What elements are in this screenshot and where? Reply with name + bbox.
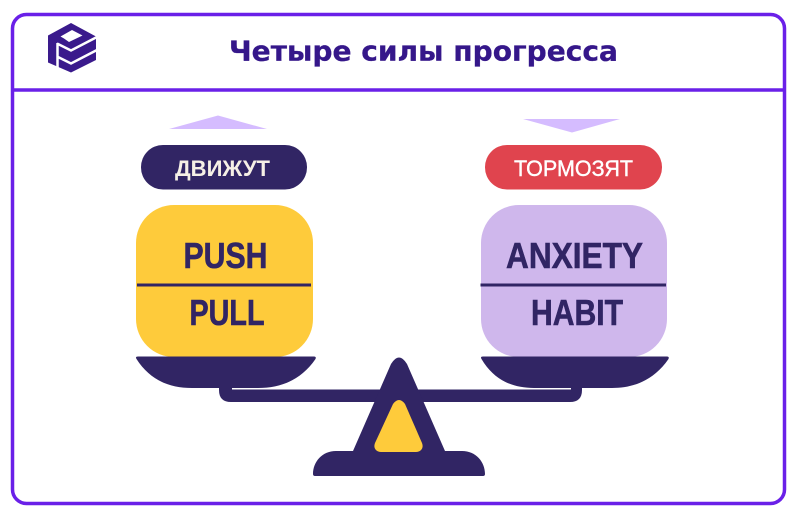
title: Четыре силы прогресса	[229, 34, 618, 68]
right pan	[481, 356, 669, 388]
fulcrum inset	[374, 400, 423, 452]
beam	[219, 386, 582, 402]
icon: logo	[48, 23, 97, 72]
left pan	[136, 356, 316, 388]
arrow: down	[523, 119, 620, 132]
label pill: тормозят	[485, 145, 662, 190]
weight: push and pull: PULL	[190, 292, 264, 333]
scale	[136, 356, 669, 476]
arrow: up	[169, 116, 267, 129]
label pill: тормозят: ТОРМОЗЯТ	[514, 156, 633, 181]
fulcrum	[313, 358, 485, 476]
weight: push and pull	[136, 205, 313, 357]
weight: anxiety and habit	[480, 205, 667, 357]
weight: anxiety and habit: ANXIETY	[506, 235, 643, 276]
weight: anxiety and habit: HABIT	[531, 292, 623, 333]
label pill: движут	[141, 145, 307, 190]
label pill: движут: ДВИЖУТ	[175, 156, 271, 181]
weight: push and pull: PUSH	[184, 235, 268, 276]
